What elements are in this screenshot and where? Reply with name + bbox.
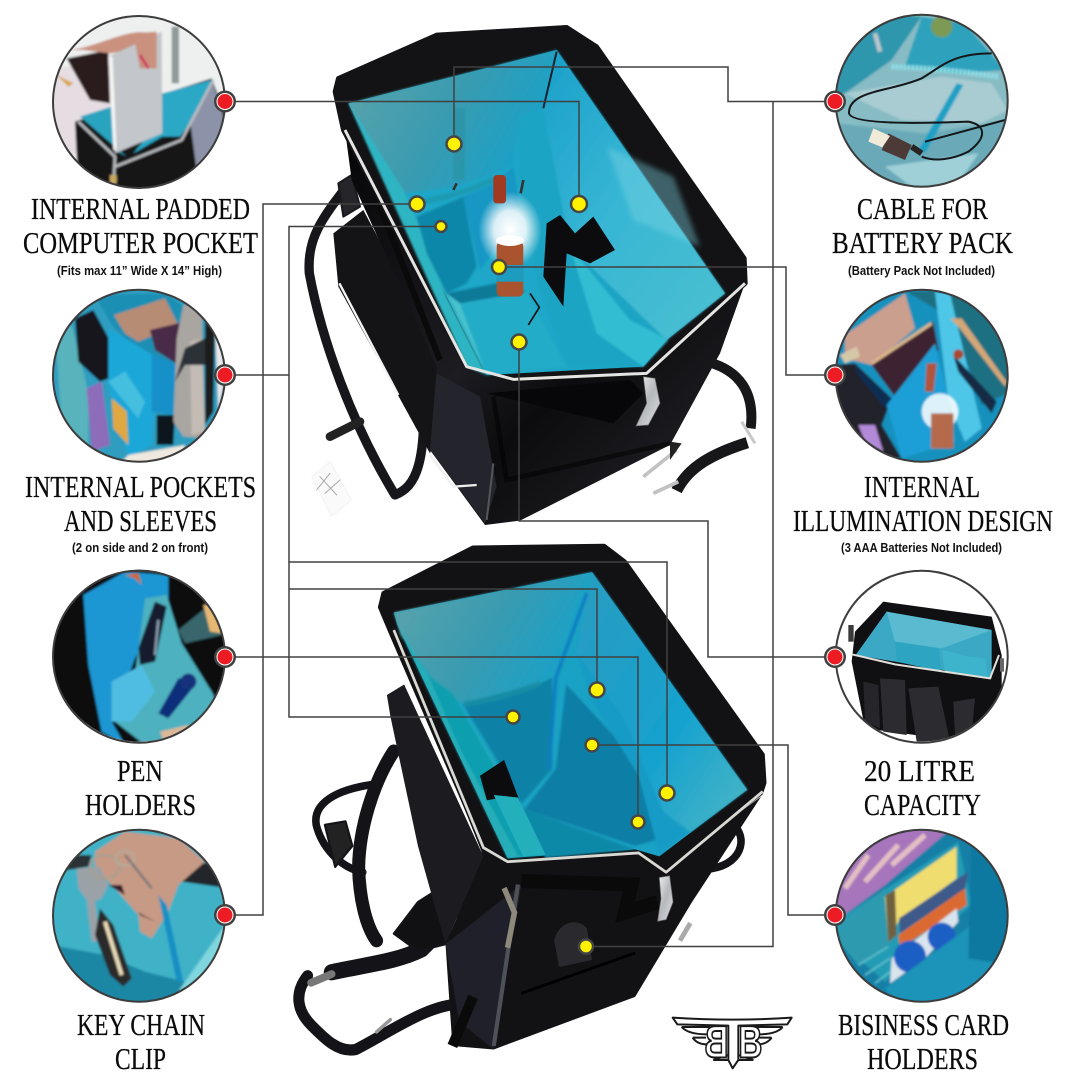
- bag body: [394, 632, 761, 1049]
- heading: internal illumination design: [793, 469, 1053, 555]
- interior lining: [394, 572, 747, 858]
- heading: cable for battery pack: CABLE FOR: [857, 191, 988, 226]
- heading: key chain clip: KEY CHAIN: [77, 1007, 205, 1042]
- backpack photo: bottom, open showing organizer: [299, 546, 764, 1050]
- back pocket panel: [333, 210, 453, 453]
- interior panels: [348, 50, 725, 375]
- heading: 20 litre capacity: [864, 753, 981, 822]
- backpack photo: top, open from above: [309, 27, 755, 525]
- heading: 20 litre capacity: 20 LITRE: [864, 753, 975, 788]
- logo: winged BTB mark: B: [704, 1017, 728, 1068]
- circle: internal pockets photo: [52, 288, 228, 465]
- circle: business card holders photo: [835, 828, 1012, 1005]
- heading: pen holders: [85, 753, 196, 822]
- heading: internal pockets and sleeves: INTERNAL POCKETS: [25, 469, 256, 504]
- circle: battery cable photo: [835, 13, 1012, 190]
- yellow marker dots: [410, 136, 674, 954]
- rim: [335, 27, 745, 379]
- zipper trim: [345, 130, 745, 379]
- pocket seam: [543, 52, 557, 108]
- heading: key chain clip: CLIP: [115, 1041, 166, 1076]
- rear straps and loop handles: [299, 751, 741, 1050]
- heading: bisiness card holders: [838, 1007, 1009, 1076]
- USB port cover: [554, 922, 592, 967]
- body detail: [446, 881, 690, 1049]
- flashlight with glow: [478, 175, 542, 297]
- heading: pen holders: HOLDERS: [85, 787, 196, 822]
- heading: internal pockets and sleeves: [25, 469, 256, 555]
- zipper trim: [394, 630, 763, 872]
- heading: key chain clip: [77, 1007, 205, 1076]
- bag body: [345, 130, 745, 525]
- connector lines: [225, 67, 835, 946]
- heading: internal padded computer pocket: INTERNAL PADDED: [31, 191, 250, 226]
- heading: internal illumination design: (3 AAA Batteries Not Included): [841, 540, 1002, 555]
- heading: cable for battery pack: (Battery Pack Not Included): [848, 263, 995, 278]
- back panel: [387, 684, 483, 944]
- circle: key chain photo: [52, 828, 228, 1005]
- heading: internal padded computer pocket: [23, 191, 258, 278]
- heading: internal padded computer pocket: (Fits max 11” Wide X 14” High): [57, 263, 222, 278]
- zipper pull: [658, 876, 673, 921]
- rim: [380, 546, 764, 872]
- logo: winged BTB mark: [673, 1017, 792, 1068]
- heading: internal padded computer pocket: COMPUTER POCKET: [23, 225, 258, 260]
- circle: illumination photo: [835, 288, 1012, 465]
- black elastic strap and cord: [453, 180, 615, 325]
- circle: capacity photo: [835, 568, 1012, 745]
- heading: 20 litre capacity: CAPACITY: [864, 787, 981, 822]
- heading: cable for battery pack: [832, 191, 1013, 278]
- body shading and piping: [339, 207, 670, 523]
- heading: pen holders: PEN: [117, 753, 163, 788]
- heading: cable for battery pack: BATTERY PACK: [832, 225, 1013, 260]
- circle: pen holders photo: [52, 568, 228, 745]
- interior lining: [348, 50, 725, 375]
- circle: computer pocket photo: [50, 13, 230, 193]
- heading: internal illumination design: INTERNAL: [864, 469, 980, 504]
- heading: bisiness card holders: HOLDERS: [867, 1041, 978, 1076]
- red connector dots: [214, 90, 846, 926]
- heading: internal pockets and sleeves: AND SLEEVES: [64, 503, 217, 538]
- padded strap in pocket: [480, 760, 545, 856]
- interior panels: [394, 572, 747, 858]
- logo: winged BTB mark: B: [738, 1017, 762, 1068]
- shoulder strap with tag: [309, 175, 437, 517]
- heading: internal pockets and sleeves: (2 on side and 2 on front): [72, 540, 208, 555]
- heading: bisiness card holders: BISINESS CARD: [838, 1007, 1009, 1042]
- zipper pull: [636, 377, 660, 426]
- right side strap and buckle: [643, 362, 755, 493]
